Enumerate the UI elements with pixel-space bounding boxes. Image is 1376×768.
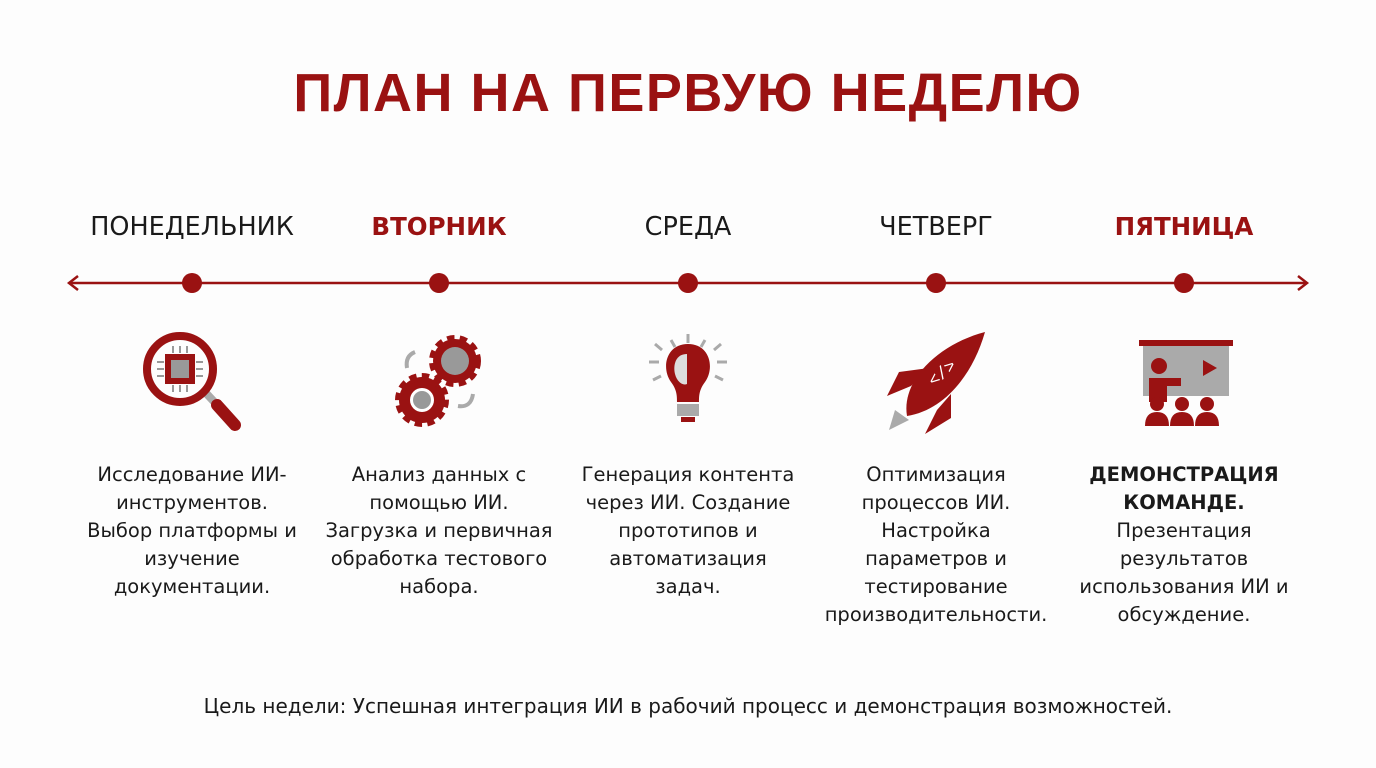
text: friday: КОМАНДЕ. <box>1123 491 1245 514</box>
text: wednesday: прототипов и <box>618 519 758 542</box>
text: thursday: Оптимизация <box>866 463 1006 486</box>
footer: Цель недели: Успешная интеграция ИИ в рабочий процесс и демонстрация возможностей. <box>204 694 1172 718</box>
text: wednesday: задач. <box>655 575 721 598</box>
title: ПЛАН НА ПЕРВУЮ НЕДЕЛЮ <box>293 63 1083 123</box>
text: thursday: параметров и <box>865 547 1007 570</box>
icon: gears with brain <box>395 335 481 427</box>
icon: rocket: </> <box>925 357 961 391</box>
text: friday: результатов <box>1120 547 1248 570</box>
text: tuesday: помощью ИИ. <box>369 491 509 514</box>
text: monday: инструментов. <box>116 491 268 514</box>
timeline <box>67 273 1309 293</box>
text: wednesday <box>582 463 794 598</box>
icon: rocket <box>887 332 985 434</box>
day: thursday: ЧЕТВЕРГ <box>879 212 993 242</box>
icon: presentation <box>1139 340 1233 426</box>
text: friday: использования ИИ и <box>1079 575 1289 598</box>
text: thursday <box>825 463 1047 626</box>
text: thursday: тестирование <box>864 575 1008 598</box>
text: monday: документации. <box>114 575 270 598</box>
day: wednesday: СРЕДА <box>645 212 731 242</box>
text: thursday: процессов ИИ. <box>862 491 1010 514</box>
text: wednesday: автоматизация <box>609 547 767 570</box>
text: monday: Исследование ИИ- <box>97 463 287 486</box>
text: tuesday <box>325 463 553 598</box>
text: monday <box>87 463 297 598</box>
text: friday: обсуждение. <box>1118 603 1250 626</box>
day: friday: ПЯТНИЦА <box>1115 212 1253 241</box>
text: friday: Презентация <box>1116 519 1252 542</box>
text: friday: ДЕМОНСТРАЦИЯ <box>1089 463 1279 486</box>
text: tuesday: обработка тестового <box>331 547 547 570</box>
text: wednesday: Генерация контента <box>582 463 794 486</box>
day: tuesday: ВТОРНИК <box>371 212 507 241</box>
day: monday: ПОНЕДЕЛЬНИК <box>90 212 294 242</box>
text: friday <box>1079 463 1289 626</box>
text: thursday: производительности. <box>825 603 1047 626</box>
text: monday: Выбор платформы и <box>87 519 297 542</box>
icon: magnifier with chip <box>143 332 241 431</box>
text: tuesday: набора. <box>399 575 479 598</box>
text: thursday: Настройка <box>881 519 991 542</box>
text: wednesday: через ИИ. Создание <box>586 491 790 514</box>
text: monday: изучение <box>144 547 240 570</box>
text: tuesday: Анализ данных с <box>352 463 526 486</box>
icon: light bulb with brain <box>649 334 727 422</box>
text: tuesday: Загрузка и первичная <box>325 519 553 542</box>
